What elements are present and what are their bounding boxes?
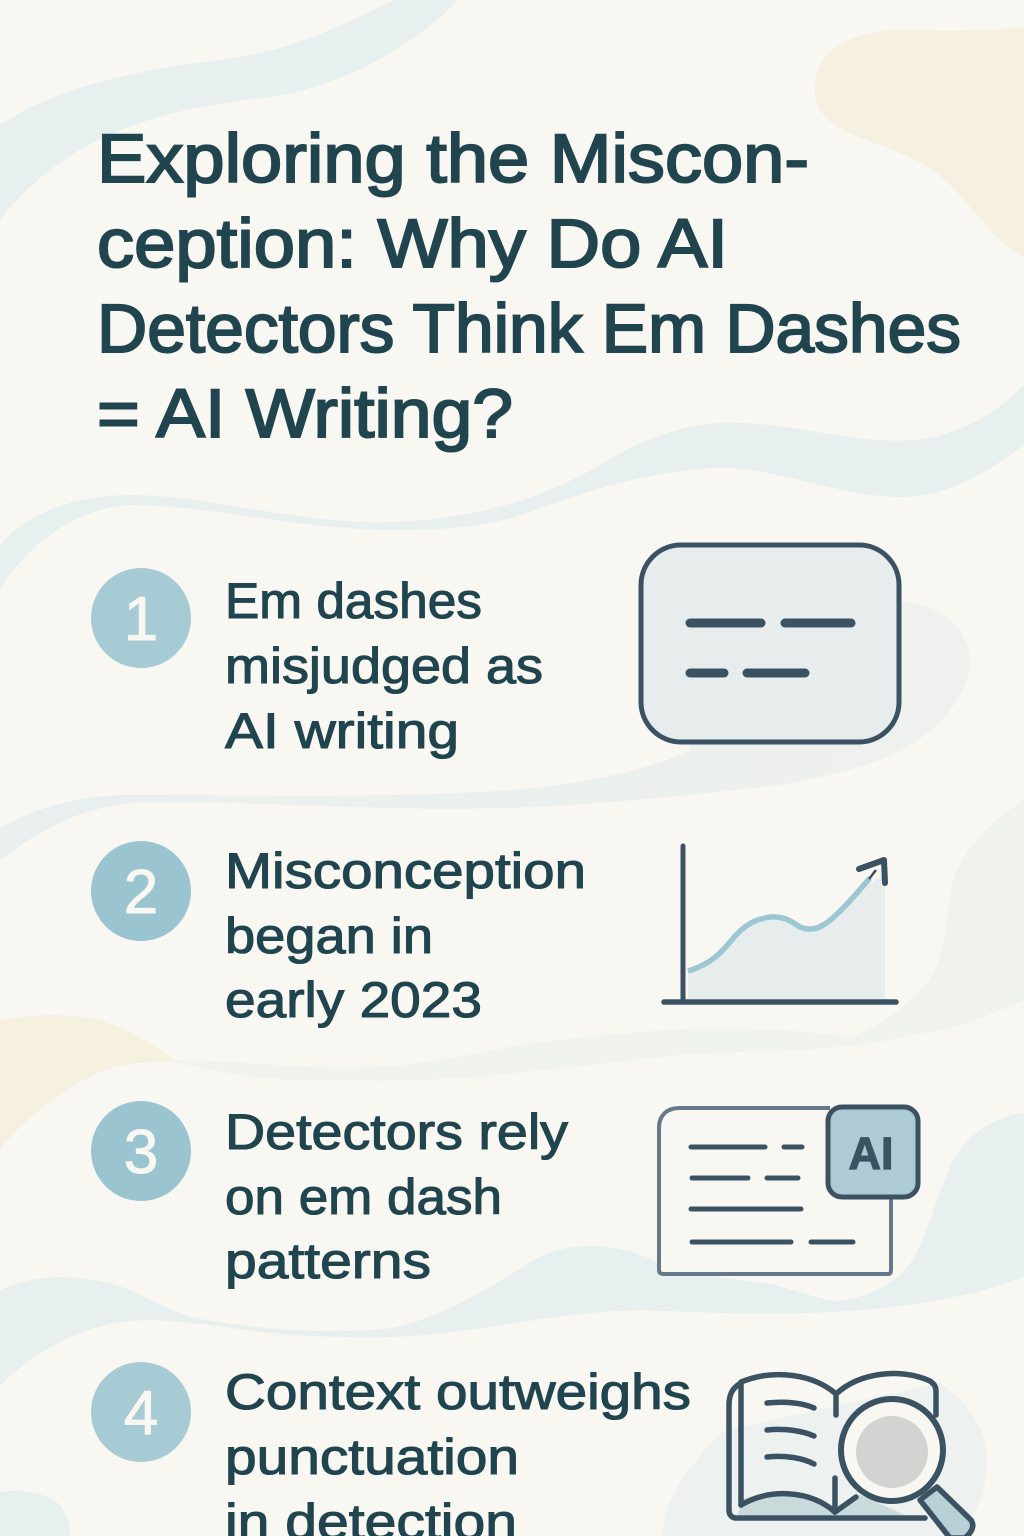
title: Detectors Think Em Dashes	[97, 290, 961, 367]
title	[97, 120, 961, 452]
icon: document with AI badge: AI	[848, 1128, 894, 1179]
text: item 2	[225, 843, 586, 1028]
text: item 3: on em dash	[225, 1169, 502, 1225]
number badge 3	[91, 1101, 191, 1201]
text: item 2: began in	[225, 908, 433, 964]
text: item 4	[225, 1364, 691, 1536]
text: item 3: patterns	[225, 1233, 431, 1289]
number badge 4: 4	[124, 1379, 158, 1448]
number badge 2: 2	[124, 858, 158, 927]
number badge 1	[91, 568, 191, 668]
icon: line chart with arrow	[664, 846, 896, 1002]
title: = AI Writing?	[97, 375, 513, 452]
text: item 2: Misconception	[225, 843, 586, 899]
item 2	[91, 841, 896, 1028]
item 3	[91, 1101, 918, 1289]
text: item 1: misjudged as	[225, 638, 543, 694]
icon: open book with magnifying glass	[729, 1374, 973, 1536]
title: Exploring the Miscon-	[97, 120, 809, 197]
text: item 1	[225, 573, 543, 759]
number badge 3: 3	[124, 1118, 158, 1187]
text: item 4: punctuation	[225, 1429, 519, 1485]
text: item 3	[225, 1104, 568, 1289]
text: item 4: Context outweighs	[225, 1364, 691, 1420]
number badge 2	[91, 841, 191, 941]
text: item 2: early 2023	[225, 972, 482, 1028]
text: item 1: Em dashes	[225, 573, 482, 629]
icon: document with AI badge	[659, 1107, 918, 1274]
text: item 1: AI writing	[225, 703, 459, 759]
text: item 3: Detectors rely	[225, 1104, 568, 1160]
title: ception: Why Do AI	[97, 205, 728, 282]
number badge 1: 1	[124, 585, 158, 654]
number badge 4	[91, 1362, 191, 1462]
icon: card with em dashes	[641, 545, 899, 742]
item 1	[91, 545, 899, 759]
item 4	[91, 1362, 973, 1536]
